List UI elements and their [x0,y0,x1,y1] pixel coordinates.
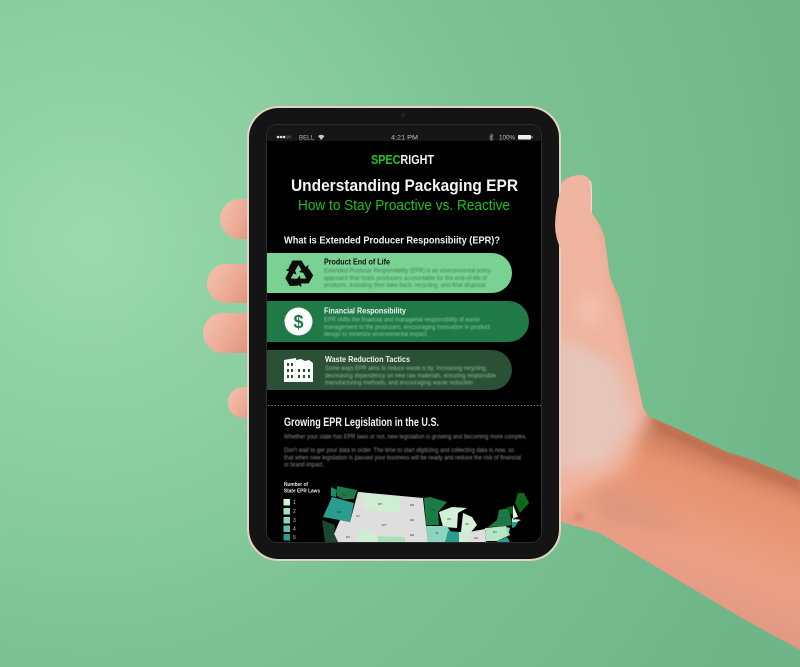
section heading: legislation: Growing EPR Legislation in the U.S. [284,417,439,429]
panel: product end of life: Product End of Life [324,256,390,266]
legend: 2 [293,509,296,515]
map of U.S. states: WI [447,517,451,521]
map of U.S. states: WY [382,523,386,527]
map of U.S. states: NV [346,535,350,539]
legislation text: Don't wait to get your data in order. The time to start digitizing and collecting data is now, so [284,448,515,454]
panel: waste reduction tactics [267,350,512,390]
map of U.S. states: OH [474,536,478,540]
panel: product end of life: approach that holds producers accountable for the end-of-life of [324,276,487,282]
title: Understanding Packaging EPR [291,176,518,195]
legend: 5 [293,535,296,541]
map of U.S. states: NY [501,516,505,520]
legend: Number of [284,482,308,488]
panel: financial responsibility [267,301,529,342]
legislation text: Whether your state has EPR laws or not, new legislation is growing and becoming more complex. [284,434,527,440]
legend: 1 [293,500,296,506]
legislation text: or brand impact. [284,462,324,468]
map of U.S. states: ID [356,514,360,518]
panel: product end of life: products, including their take-back, recycling, and final disposal. [324,283,487,289]
subtitle: How to Stay Proactive vs. Reactive [298,198,510,214]
map of U.S. states: PA [493,530,497,534]
legend: State EPR Laws [284,488,320,494]
panel: financial responsibility: Financial Responsibility [324,306,406,316]
map of U.S. states: MT [378,502,382,506]
legend: 3 [293,518,296,524]
legislation text: that when new legislation is passed your business will be ready and reduce the risk of financial [284,455,521,461]
icon: dollar: $ [293,312,304,332]
map of U.S. states [322,486,529,542]
map of U.S. states: SD [410,518,415,522]
icon: recycling [282,260,315,289]
map of U.S. states: MN [431,508,435,512]
status bar: BELL [299,134,314,142]
panel: waste reduction tactics: Waste Reduction Tactics [325,354,410,364]
legend [284,482,320,541]
panel: product end of life: Extended Producer Responsibility (EPR) is an environmental policy [324,268,491,274]
map of U.S. states: IA [436,531,438,535]
panel: waste reduction tactics: decreasing dependency on new raw materials, ensuring responsible [325,373,497,379]
map of U.S. states: MI [465,522,469,526]
panel: financial responsibility: management to the producers, encouraging innovation in product [324,325,490,331]
panel: waste reduction tactics: manufacturing methods, and encouraging waste reduction [325,380,473,386]
map of U.S. states: ME [519,500,523,504]
hand and arm [561,175,800,650]
section heading: what is EPR: What is Extended Producer Responsibiity (EPR)? [284,236,500,246]
icon: factory building [284,358,313,382]
tablet screen [267,125,541,542]
panel: waste reduction tactics: Some ways EPR aims to reduce waste is by: Increasing recycling, [325,366,487,372]
legend: 4 [293,526,296,532]
icon: dollar [284,308,312,336]
logo: SPECRIGHT [371,153,434,167]
legislation text [284,434,527,468]
map of U.S. states: ND [410,503,415,507]
fingers [203,199,273,418]
panel: product end of life [267,253,512,293]
status bar: 100% [499,134,515,142]
status bar [267,125,541,142]
map of U.S. states: MA [513,517,517,521]
map of U.S. states: NE [410,533,414,537]
map of U.S. states: OR [337,510,342,514]
map of U.S. states: WA [342,493,346,497]
panel: financial responsibility: design to minimize environmental impact. [324,332,428,338]
status bar: 4:21 PM [391,134,418,142]
panel: financial responsibility: EPR shifts the financial and managerial responsibility of waste [324,318,481,324]
tablet body [247,106,561,561]
